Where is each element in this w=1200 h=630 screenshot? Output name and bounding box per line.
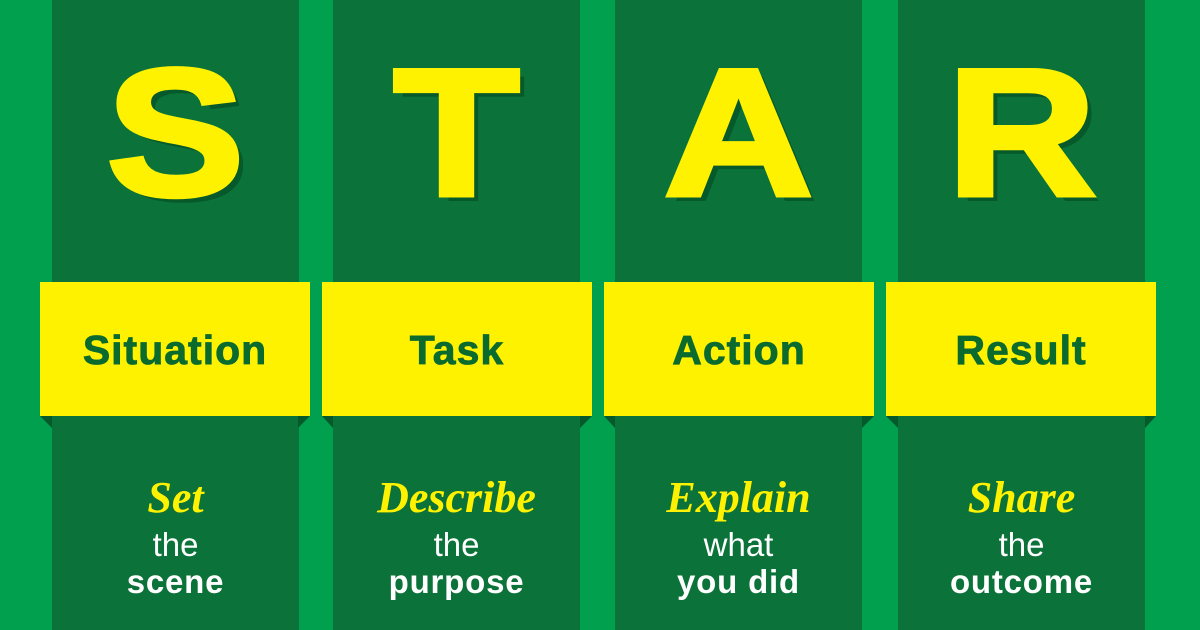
band: Action: [604, 282, 874, 416]
description: set the scene: scene: [127, 563, 224, 600]
column: S: [52, 0, 299, 630]
column: A: [615, 0, 862, 630]
description: share the outcome: outcome: [950, 563, 1093, 600]
description: share the outcome: Share: [968, 473, 1075, 522]
description: set the scene: the: [153, 526, 198, 563]
band: Result: [886, 282, 1156, 416]
description: describe the purpose: [376, 473, 536, 600]
description: set the scene: Set: [147, 473, 204, 522]
band: Situation: [40, 282, 310, 416]
band: Action: Action: [672, 327, 806, 373]
description: explain what you did: what: [704, 526, 773, 563]
letter R: R: [947, 32, 1096, 234]
description: explain what you did: you did: [677, 563, 800, 600]
description: share the outcome: the: [999, 526, 1044, 563]
letter A: A: [664, 32, 813, 234]
column: T: [333, 0, 580, 630]
band: Task: Task: [410, 327, 504, 373]
band: Situation: Situation: [83, 327, 267, 373]
description: describe the purpose: purpose: [389, 563, 524, 600]
letter S: S: [107, 32, 244, 234]
description: share the outcome: [950, 473, 1093, 600]
description: describe the purpose: the: [434, 526, 479, 563]
letter T: T: [393, 32, 520, 234]
column: R: [898, 0, 1145, 630]
description: explain what you did: Explain: [666, 473, 811, 522]
description: describe the purpose: Describe: [377, 473, 536, 522]
description: explain what you did: [666, 473, 811, 600]
description: set the scene: [127, 473, 224, 600]
band: Task: [322, 282, 592, 416]
band: Result: Result: [955, 327, 1087, 373]
